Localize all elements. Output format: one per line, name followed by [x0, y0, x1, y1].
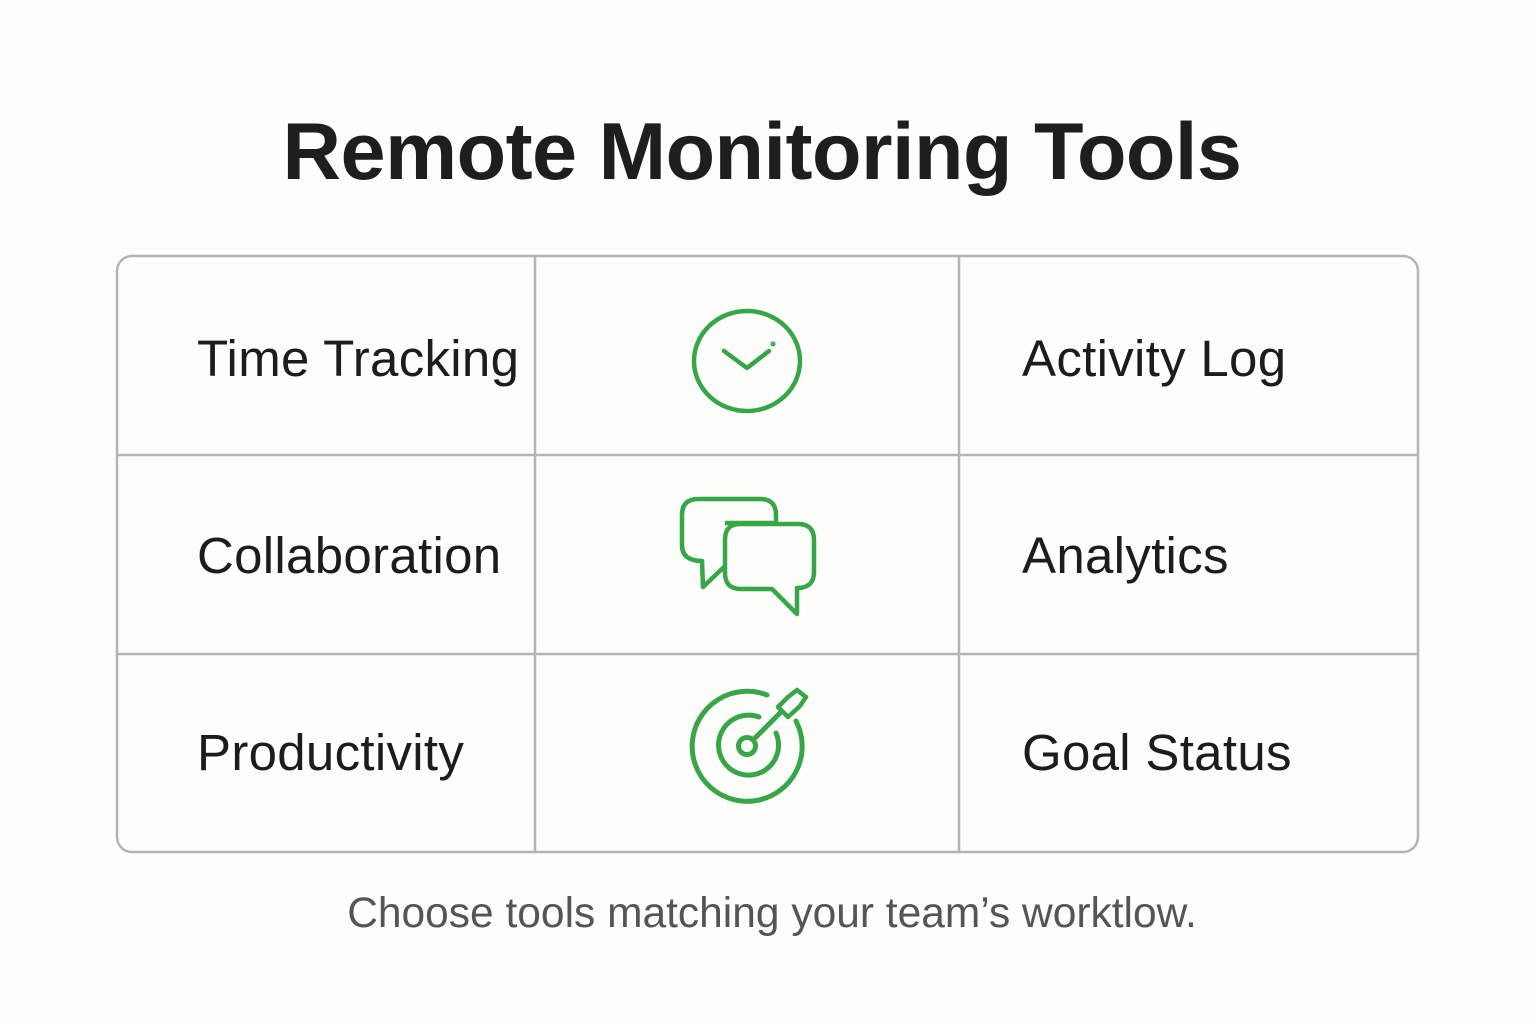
footer note: Choose tools matching your team’s worktlow.	[347, 890, 1197, 937]
icon: target	[690, 688, 808, 804]
label: Collaboration: Collaboration	[197, 527, 501, 584]
icon: chat bubbles	[680, 496, 816, 616]
label: Productivity: Productivity	[197, 724, 464, 781]
label: Time Tracking: Time Tracking	[197, 330, 519, 387]
label: Activity Log: Activity Log	[1022, 330, 1286, 387]
label: Analytics: Analytics	[1022, 527, 1229, 584]
title: Remote Monitoring Tools	[283, 107, 1241, 197]
label: Goal Status: Goal Status	[1022, 724, 1292, 781]
icon: clock	[692, 308, 802, 414]
